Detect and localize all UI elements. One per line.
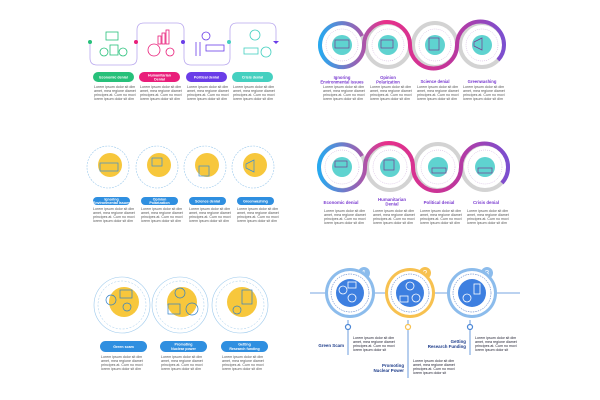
panel: middle-right wave circles: amet, mea regione diamet <box>373 213 415 217</box>
text blocks: principes at. Cum no movi <box>187 93 229 97</box>
pills: Science denial <box>195 199 220 203</box>
panel: bottom-left green scam: principes at. Cum no movi <box>222 363 264 367</box>
panel: bottom-right numbered timeline <box>310 267 520 378</box>
panel: bottom-right numbered timeline: Lorem ipsum dolor sit dim <box>353 336 394 340</box>
pills: Ignoring <box>104 198 119 202</box>
panel: middle-right wave circles: Political denial <box>424 200 454 205</box>
pills: Polarization <box>149 201 170 205</box>
panel: bottom-left green scam: amet, mea regione diamet <box>222 359 264 363</box>
titles: Opinion <box>380 75 396 80</box>
panel: middle-left blue/yellow circles: amet, mea regione diamet <box>93 211 135 215</box>
panel: middle-left blue/yellow circles: Lorem ipsum dolor sit dim <box>93 207 134 211</box>
pill: Humanitarian Denial: Humanitarian <box>148 73 171 77</box>
text blocks: Lorem ipsum dolor sit dim <box>140 85 181 89</box>
panel: middle-right wave circles: principes at. Cum no movi <box>467 217 509 221</box>
pill: Crisis denial <box>232 72 273 82</box>
panel: middle-right wave circles: principes at. Cum no movi <box>324 217 366 221</box>
icon: political <box>196 32 224 56</box>
panel: middle-right wave circles: Lorem ipsum dolor sit dim <box>373 209 414 213</box>
panel: bottom-left green scam: lorem ipsum dolor sit dim <box>101 367 141 371</box>
text blocks: lorem ipsum dolor sit dim <box>187 97 227 101</box>
text blocks: Lorem ipsum dolor sit dim <box>233 85 274 89</box>
panel: bottom-left green scam: Green scam <box>113 345 134 349</box>
text blocks: principes at. Cum no movi <box>94 93 136 97</box>
panel: bottom-right numbered timeline: Research Funding <box>428 344 466 349</box>
panel: middle-right wave circles: Lorem ipsum dolor sit dim <box>324 209 365 213</box>
panel: middle-right wave circles: Economic denial <box>324 200 358 205</box>
badges: 1 <box>362 269 367 278</box>
text blocks: lorem ipsum dolor sit dim <box>140 97 180 101</box>
badges: 3 <box>485 269 490 278</box>
panel: middle-left blue/yellow circles: lorem ipsum dolor sit dim <box>93 219 133 223</box>
panel: middle-right wave circles: Lorem ipsum dolor sit dim <box>420 209 461 213</box>
pills <box>93 197 274 205</box>
panel: middle-left blue/yellow circles: lorem ipsum dolor sit dim <box>237 219 277 223</box>
panel: middle-left blue/yellow circles: lorem ipsum dolor sit dim <box>141 219 181 223</box>
panel: bottom-right numbered timeline: Getting <box>451 339 466 344</box>
icon: humanitarian <box>148 30 174 56</box>
panel: middle-right wave circles: principes at. Cum no movi <box>373 217 415 221</box>
panel: bottom-right numbered timeline: principes at. Cum no movi <box>353 344 395 348</box>
panel: bottom-right numbered timeline: lorem ipsum dolor sit <box>475 348 508 352</box>
panel: bottom-right numbered timeline: principes at. Cum no movi <box>475 344 517 348</box>
panel: bottom-left green scam: lorem ipsum dolor sit dim <box>161 367 201 371</box>
panel: top-right wave circles: lorem ipsum dolor sit dim <box>463 97 503 101</box>
panel: bottom-right numbered timeline: Promoting <box>382 363 404 368</box>
panel: bottom-right numbered timeline: lorem ipsum dolor sit <box>353 348 386 352</box>
panel: top-right wave circles: lorem ipsum dolor sit dim <box>370 97 410 101</box>
panel: middle-right wave circles <box>319 143 509 225</box>
panel: middle-right wave circles: amet, mea regione diamet <box>324 213 366 217</box>
panel: middle-left blue/yellow circles: lorem ipsum dolor sit dim <box>189 219 229 223</box>
panel: middle-right wave circles: lorem ipsum dolor sit dim <box>324 221 364 225</box>
gradient wave <box>320 21 504 68</box>
panel: middle-left blue/yellow circles: principes at. Cum no movi <box>93 215 135 219</box>
pills: Environmental Issues <box>93 201 130 205</box>
panel: top-right wave circles: Lorem ipsum dolor sit dim <box>417 85 458 89</box>
panel: middle-left blue/yellow circles: amet, mea regione diamet <box>189 211 231 215</box>
panel: bottom-left green scam: amet, mea regione diamet <box>161 359 203 363</box>
panel: bottom-left green scam: principes at. Cum no movi <box>101 363 143 367</box>
text blocks: Lorem ipsum dolor sit dim <box>94 85 135 89</box>
panel: middle-right wave circles: amet, mea regione diamet <box>467 213 509 217</box>
panel: bottom-right numbered timeline: amet, mea regione diamet <box>475 340 517 344</box>
panel: middle-right wave circles: Denial <box>385 202 399 206</box>
titles: Ignoring <box>334 75 351 80</box>
panel: top-right wave circles: lorem ipsum dolor sit dim <box>417 97 457 101</box>
pill: Crisis denial: Crisis denial <box>242 76 263 80</box>
panel: top-right wave circles: amet, mea regione diamet <box>463 89 505 93</box>
panel: bottom-left green scam: Research funding <box>229 347 260 351</box>
panel: top-right wave circles: amet, mea regione diamet <box>417 89 459 93</box>
text blocks: amet, mea regione diamet <box>94 89 136 93</box>
text blocks: principes at. Cum no movi <box>140 93 182 97</box>
panel: top-right wave circles: Lorem ipsum dolor sit dim <box>370 85 411 89</box>
text blocks: principes at. Cum no movi <box>233 93 275 97</box>
panel: top-right wave circles: principes at. Cum no movi <box>463 93 505 97</box>
panel: bottom-left green scam: Nuclear power <box>171 347 196 351</box>
icon circles <box>326 29 498 61</box>
panel: bottom-right numbered timeline: principes at. Cum no movi <box>413 367 455 371</box>
panel: bottom-left green scam <box>94 277 268 371</box>
panel: middle-right wave circles: amet, mea regione diamet <box>420 213 462 217</box>
panel: top-right wave circles <box>320 21 505 101</box>
panel: middle-left blue/yellow circles: Lorem ipsum dolor sit dim <box>141 207 182 211</box>
text blocks: lorem ipsum dolor sit dim <box>94 97 134 101</box>
panel: bottom-left green scam: Lorem ipsum dolor sit dim <box>161 355 202 359</box>
panel: top-right wave circles: amet, mea regione diamet <box>323 89 365 93</box>
panel: middle-left blue/yellow circles: amet, mea regione diamet <box>237 211 279 215</box>
pills: Opinion <box>153 198 166 202</box>
panel: middle-right wave circles: Humanitarian <box>378 197 406 202</box>
text blocks: amet, mea regione diamet <box>187 89 229 93</box>
grey rings <box>320 23 504 67</box>
badges <box>358 267 493 279</box>
panel: middle-left blue/yellow circles: Lorem ipsum dolor sit dim <box>237 207 278 211</box>
icon: crisis <box>244 30 271 57</box>
panel: middle-right wave circles: principes at. Cum no movi <box>420 217 462 221</box>
badges: 2 <box>423 269 428 278</box>
panel: top-right wave circles: principes at. Cum no movi <box>323 93 365 97</box>
panel: top-right wave circles: lorem ipsum dolor sit dim <box>323 97 363 101</box>
pill: Humanitarian Denial: Denial <box>154 77 165 81</box>
panel: top-right wave circles: principes at. Cum no movi <box>370 93 412 97</box>
panel: middle-left blue/yellow circles: amet, mea regione diamet <box>141 211 183 215</box>
panel: middle-left blue/yellow circles: principes at. Cum no movi <box>237 215 279 219</box>
panel: top-right wave circles: amet, mea regione diamet <box>370 89 412 93</box>
text blocks: amet, mea regione diamet <box>140 89 182 93</box>
icon: economic <box>100 32 127 56</box>
panel: top-right wave circles: principes at. Cum no movi <box>417 93 459 97</box>
titles: Greenwashing <box>468 79 497 84</box>
titles: Environmental Issues <box>320 80 364 84</box>
panel: bottom-left green scam: principes at. Cum no movi <box>161 363 203 367</box>
panel: bottom-left green scam: Promoting <box>175 343 192 347</box>
panel: bottom-right numbered timeline: Green Scam <box>318 343 344 348</box>
panel: bottom-right numbered timeline: Lorem ipsum dolor sit dim <box>475 336 516 340</box>
pills: Greenwashing <box>243 199 268 203</box>
panel: bottom-left green scam: Lorem ipsum dolor sit dim <box>101 355 142 359</box>
panel: bottom-right numbered timeline: amet, mea regione diamet <box>413 363 455 367</box>
pill: Economic denial <box>93 72 134 82</box>
text blocks: amet, mea regione diamet <box>233 89 275 93</box>
pill: Humanitarian Denial <box>139 72 180 82</box>
panel: middle-left blue/yellow circles: Lorem ipsum dolor sit dim <box>189 207 230 211</box>
titles: Science denial <box>420 79 450 84</box>
connector path <box>90 23 276 65</box>
panel: middle-right wave circles: Crisis denial <box>473 200 499 205</box>
panel: bottom-left green scam: lorem ipsum dolor sit dim <box>222 367 262 371</box>
panel: middle-right wave circles: lorem ipsum dolor sit dim <box>420 221 460 225</box>
panel: middle-left blue/yellow circles: principes at. Cum no movi <box>141 215 183 219</box>
panel: middle-left blue/yellow circles <box>87 146 279 223</box>
panel: middle-right wave circles: lorem ipsum dolor sit dim <box>467 221 507 225</box>
panel: bottom-right numbered timeline: Lorem ipsum dolor sit dim <box>413 359 454 363</box>
titles <box>320 75 497 84</box>
text blocks: lorem ipsum dolor sit dim <box>233 97 273 101</box>
text blocks <box>94 85 275 101</box>
panel: bottom-right numbered timeline: amet, mea regione diamet <box>353 340 395 344</box>
panel: bottom-left green scam: amet, mea regione diamet <box>101 359 143 363</box>
panel: top-left denial types <box>88 23 279 101</box>
panel: top-right wave circles: Lorem ipsum dolor sit dim <box>463 85 504 89</box>
pill: Political denial: Political denial <box>194 76 219 80</box>
text blocks: Lorem ipsum dolor sit dim <box>187 85 228 89</box>
titles: Polarization <box>376 80 400 84</box>
panel: bottom-right numbered timeline: Nuclear Power <box>373 368 404 373</box>
panel: bottom-left green scam: Getting <box>238 343 251 347</box>
panel: bottom-left green scam: Lorem ipsum dolor sit dim <box>222 355 263 359</box>
panel: top-right wave circles: Lorem ipsum dolor sit dim <box>323 85 364 89</box>
pill: Economic denial: Economic denial <box>99 76 128 80</box>
panel: bottom-right numbered timeline: lorem ipsum dolor sit <box>413 371 446 375</box>
pill: Political denial <box>186 72 227 82</box>
panel: middle-left blue/yellow circles: principes at. Cum no movi <box>189 215 231 219</box>
panel: middle-right wave circles: Lorem ipsum dolor sit dim <box>467 209 508 213</box>
panel: middle-right wave circles: lorem ipsum dolor sit dim <box>373 221 413 225</box>
